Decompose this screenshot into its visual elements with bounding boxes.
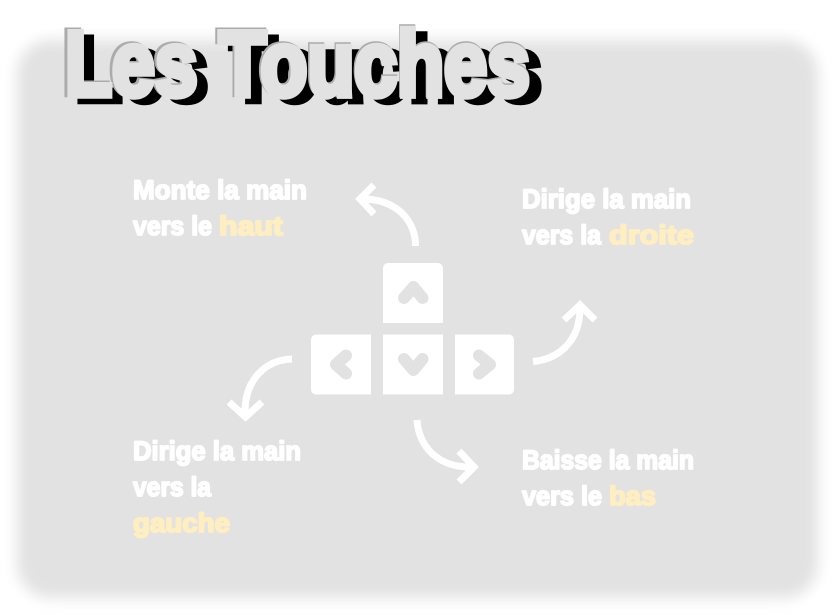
- title: Les Touches: [65, 14, 530, 116]
- label: right: droite: [609, 220, 694, 250]
- label: up: Monte la main: [133, 175, 307, 205]
- label: down: [522, 445, 694, 511]
- key: down: [383, 334, 443, 394]
- label: down: bas: [609, 481, 656, 511]
- label: left: gauche: [133, 508, 230, 538]
- label: right: vers la: [522, 220, 602, 250]
- arrow: up-left: [360, 185, 416, 246]
- key: up: [383, 263, 443, 323]
- key: right: [455, 334, 514, 394]
- label: down: vers le: [522, 481, 602, 511]
- label: left: vers la: [133, 472, 212, 502]
- arrow: down-right: [417, 420, 474, 482]
- label: up: haut: [219, 211, 283, 241]
- label: up: [133, 175, 307, 241]
- key: left: [311, 334, 371, 394]
- label: up: vers le: [133, 211, 212, 241]
- label: right: Dirige la main: [522, 184, 691, 214]
- label: right: [522, 184, 694, 250]
- arrow: right-up: [533, 305, 595, 362]
- label: down: Baisse la main: [522, 445, 694, 475]
- title: Les Touches: [75, 19, 542, 121]
- label: left: Dirige la main: [133, 436, 301, 466]
- title: Les Touches: [62, 12, 530, 114]
- label: left: [133, 436, 301, 538]
- arrow: left-down: [229, 359, 292, 417]
